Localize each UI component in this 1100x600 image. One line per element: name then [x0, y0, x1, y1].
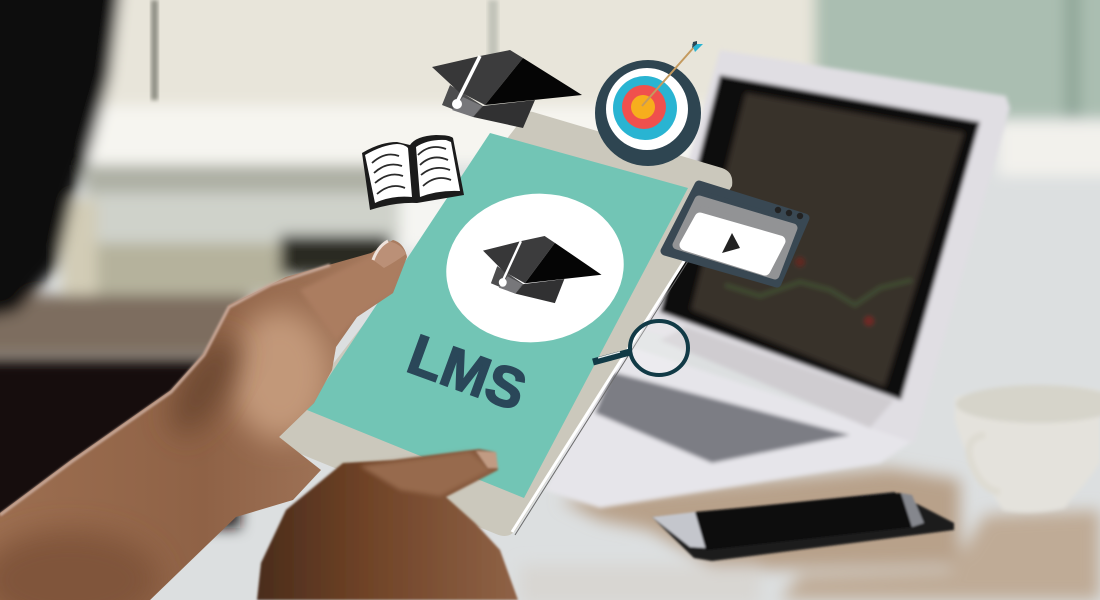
finger shading: [360, 452, 490, 496]
LMS text: LMS: [400, 322, 534, 424]
left arm and palm: [0, 240, 407, 600]
play triangle: [722, 233, 740, 253]
tablet: [279, 112, 732, 536]
smartphone on table: [652, 492, 954, 561]
arrow: [642, 46, 695, 106]
left hand holding tablet: [0, 240, 407, 600]
icon: magnifying glass: [593, 321, 688, 375]
tablet frame: [279, 112, 732, 536]
icon: target with arrow: [595, 41, 703, 166]
wrist highlight: [0, 265, 330, 515]
thumbnail: [373, 241, 406, 268]
icon: video player window: [665, 185, 805, 283]
laptop: [545, 50, 1010, 508]
fingertip nail: [476, 451, 498, 468]
icon: open book: [362, 135, 464, 210]
chart on screen: [725, 280, 912, 305]
coffee cup: [955, 385, 1100, 513]
laptop base: [545, 345, 914, 508]
laptop keyboard: [595, 372, 850, 463]
icon: graduation cap on tablet: [483, 236, 602, 303]
white circle: [437, 182, 633, 354]
book lines: [372, 147, 451, 194]
laptop lid: [640, 50, 1010, 443]
laptop screen: [660, 75, 980, 400]
palm and arm shading: [0, 240, 407, 600]
right hand tapping: [257, 449, 518, 600]
tablet edge: [512, 192, 728, 532]
icon: graduation cap: [432, 50, 582, 128]
tablet screen: [307, 133, 688, 498]
wooden table patches: [520, 468, 1100, 600]
